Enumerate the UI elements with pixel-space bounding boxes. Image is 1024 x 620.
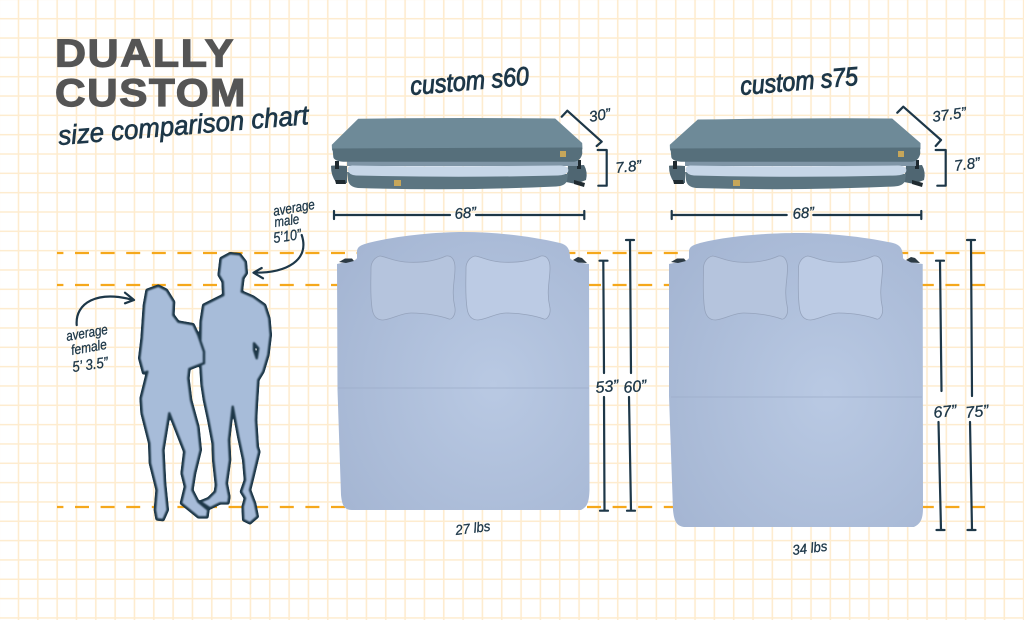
title — [55, 32, 247, 115]
title: DUALLY — [55, 32, 235, 76]
dimension: s75 full length 75 inches: 75” — [965, 403, 990, 422]
dimension: s60 inner length 53 inches: 53” — [595, 378, 620, 397]
mattress: custom s75 — [669, 119, 925, 189]
dimension: s60 depth 30 inches: 30” — [588, 105, 613, 126]
label: average female — [65, 321, 110, 376]
arrow: to female figure — [77, 293, 134, 325]
bed: custom s60 top view — [337, 232, 590, 510]
dimension: s60 width 68 inches — [334, 204, 584, 223]
subtitle: size comparison chart — [57, 100, 311, 151]
arrow: to male figure — [254, 235, 303, 278]
dimension: s60 height 7.8 inches: 7.8” — [615, 157, 643, 177]
label: average male: male — [273, 211, 300, 230]
dimension: s60 full length 60 inches: 60” — [623, 378, 648, 397]
dimension: s75 full length 75 inches — [965, 240, 990, 530]
dimension: s60 height 7.8 inches — [598, 150, 643, 186]
bed: custom s75 top view — [669, 233, 923, 527]
side strap: left — [671, 258, 686, 263]
dimension: s75 width 68 inches — [672, 204, 921, 223]
label: average male: average — [272, 196, 316, 219]
heading: custom s75: custom s75 — [739, 61, 860, 101]
heading: custom s60: custom s60 — [409, 61, 531, 101]
dimension: s75 depth 37.5 inches — [897, 104, 968, 146]
silhouette: male — [200, 253, 271, 523]
label: average male — [272, 196, 316, 247]
dimension: s75 inner length 67 inches: 67” — [933, 403, 958, 422]
mattress: custom s60 — [331, 118, 587, 189]
label: average female: average — [65, 321, 109, 344]
dimension: s75 height 7.8 inches: 7.8” — [953, 154, 982, 175]
dimension: s75 height 7.8 inches — [936, 150, 982, 186]
label: average female: 5’ 3.5” — [71, 354, 110, 376]
dimension: s60 inner length 53 inches — [595, 261, 620, 511]
pillow: left — [371, 256, 455, 320]
dimension: s75 depth 37.5 inches: 37.5” — [931, 104, 968, 126]
label: average female: female — [70, 336, 108, 358]
pillow: left — [703, 256, 788, 320]
label: average male: 5’10” — [272, 226, 303, 247]
pillow: right — [798, 256, 883, 320]
weight label: s60: 27 lbs — [453, 518, 491, 538]
weight label: s75: 34 lbs — [791, 538, 828, 558]
dimension: s75 inner length 67 inches — [933, 261, 958, 530]
side strap: right — [573, 257, 587, 263]
side strap: right — [906, 257, 920, 263]
dimension: s60 depth 30 inches — [562, 105, 613, 146]
side strap: left — [339, 258, 354, 263]
dimension: s60 full length 60 inches — [623, 240, 648, 511]
title: CUSTOM — [55, 72, 247, 115]
figures: average male and female silhouettes — [139, 253, 271, 523]
dimension: s60 width 68 inches: 68” — [454, 204, 478, 223]
dimension: s75 width 68 inches: 68” — [792, 204, 816, 223]
silhouette: female — [139, 286, 208, 520]
pillow: right — [466, 256, 550, 320]
